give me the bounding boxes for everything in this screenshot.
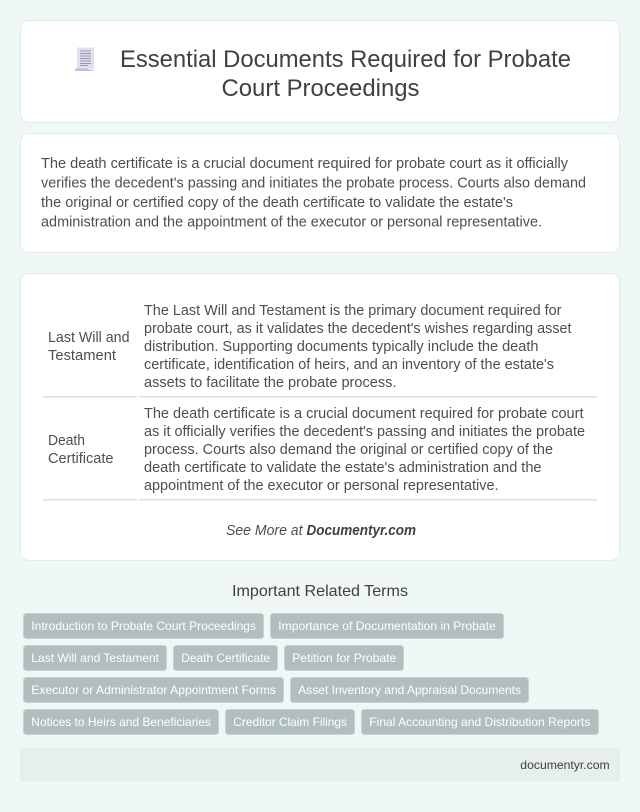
- tag: [290, 678, 528, 702]
- tag: [24, 614, 264, 638]
- text block: intro paragraph: administration and the appointment of the executor or personal representative.: [41, 214, 542, 230]
- row text: Death Certificate description: death certificate to validate the estate's administration and the: [144, 460, 542, 476]
- tag: [362, 710, 598, 734]
- title: Essential Documents Required for Probate: [120, 46, 571, 73]
- row label: Death Certificate: Death: [48, 433, 85, 449]
- tag: Petition for Probate: [292, 651, 397, 665]
- row text: Death Certificate description: process. Courts also demand the original or certified copy of the: [144, 442, 553, 458]
- panel: intro text card: [20, 134, 620, 252]
- title: Court Proceedings: [222, 75, 420, 102]
- row text: Death Certificate description: appointment of the executor or personal representative.: [144, 478, 498, 494]
- row text: Death Certificate description: The death certificate is a crucial document required for probate court: [144, 406, 584, 422]
- tag: Notices to Heirs and Beneficiaries: [31, 715, 211, 729]
- tag: Introduction to Probate Court Proceedings: [31, 619, 256, 633]
- tag: Asset Inventory and Appraisal Documents: [298, 683, 521, 697]
- footer bar: [20, 748, 620, 782]
- tag: [174, 646, 278, 670]
- row text: Last Will description: distribution. Supporting documents typically include the death: [144, 339, 538, 355]
- tag: [24, 710, 218, 734]
- row text: Death Certificate description: [144, 406, 585, 494]
- icon: document scroll: [75, 48, 94, 71]
- text block: intro paragraph: the original or certified copy of the death certificate to validate the estate's: [41, 195, 513, 211]
- tag: Importance of Documentation in Probate: [278, 619, 496, 633]
- tag: [24, 646, 166, 670]
- table row: Death Certificate: [48, 406, 585, 494]
- heading: Important Related Terms: Important Related Terms: [232, 583, 408, 600]
- tag: [24, 678, 284, 702]
- row label: Last Will and Testament: Last Will and: [48, 330, 130, 346]
- tag: [284, 646, 404, 670]
- tag: [226, 710, 354, 734]
- row label: Last Will and Testament: Testament: [48, 348, 116, 364]
- tag: Final Accounting and Distribution Reports: [369, 715, 590, 729]
- footer bar: documentyr.com: [520, 758, 610, 772]
- text block: intro paragraph: The death certificate is a crucial document required for probate court as it officially: [41, 156, 569, 172]
- row text: Last Will description: [144, 303, 572, 391]
- table row: Last Will and Testament: [48, 303, 572, 391]
- text block: intro paragraph: [41, 156, 586, 230]
- link: See More at Documentyr.com: [226, 523, 416, 539]
- row text: Last Will description: The Last Will and Testament is the primary document required for: [144, 303, 562, 319]
- tag: Creditor Claim Filings: [233, 715, 347, 729]
- row label: Last Will and Testament: [48, 330, 130, 364]
- tag: Last Will and Testament: [31, 651, 160, 665]
- title: [120, 46, 571, 102]
- row text: Last Will description: assets to facilitate the probate process.: [144, 375, 396, 391]
- row text: Last Will description: certificate, identification of heirs, and an inventory of the estate's: [144, 357, 554, 373]
- link: See More at Documentyr.com: See More at: [226, 523, 303, 539]
- tag: Death Certificate: [181, 651, 270, 665]
- link: See More at Documentyr.com: Documentyr.com: [306, 523, 416, 539]
- row text: Death Certificate description: as it officially verifies the decedent's passing and initiates the probate: [144, 424, 585, 440]
- panel: title card: [20, 20, 620, 122]
- panel: related term tags: [24, 614, 598, 734]
- row text: Last Will description: probate court, as it validates the decedent's wishes regarding asset: [144, 321, 572, 337]
- tag: [270, 614, 504, 638]
- panel: document table card: [20, 274, 620, 560]
- row label: Death Certificate: [48, 433, 114, 467]
- text block: intro paragraph: verifies the decedent's passing and initiates the probate process. Courts also demand: [41, 176, 586, 192]
- tag: Executor or Administrator Appointment Forms: [31, 683, 276, 697]
- row label: Death Certificate: Certificate: [48, 451, 114, 467]
